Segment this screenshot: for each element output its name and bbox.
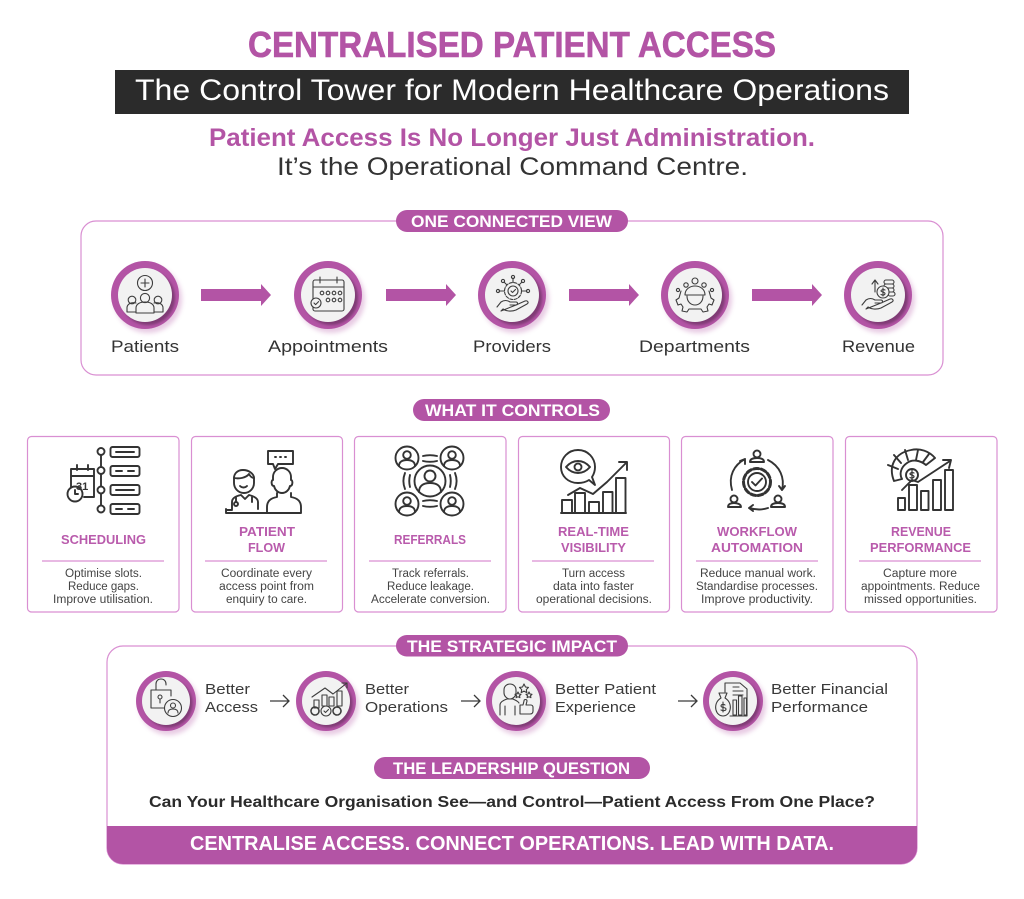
description: Coordinate every [221,568,312,580]
title: CENTRALISED PATIENT ACCESS [248,24,776,65]
node: departments [639,261,750,356]
label: providers: Providers [473,337,551,356]
description: Reduce gaps. [68,581,139,593]
description: Improve utilisation. [53,594,153,606]
heading [239,524,295,555]
footer banner [107,826,917,864]
heading: WORKFLOW [717,524,798,539]
icon: schedule timeline: 31 [76,481,88,493]
icon: chart and gears [311,683,347,716]
tagline: Patient Access Is No Longer Just Administration. [209,124,815,152]
heading: the leadership question: THE LEADERSHIP QUESTION [393,759,630,778]
description [861,568,980,606]
heading [870,524,971,555]
description [53,568,153,606]
arrow [386,284,456,306]
icon: revenue gauge [888,449,953,510]
description: Reduce leakage. [387,581,474,593]
label: Access [205,699,258,716]
label [205,681,258,716]
heading: REFERRALS [394,532,466,547]
panel: the strategic impact [107,635,917,864]
icon: gear cycle [728,450,785,511]
label: patients: Patients [111,337,179,356]
panel: workflow automation [682,436,833,612]
description [219,568,314,606]
label: Better Financial [771,681,888,698]
heading [711,524,803,555]
heading: VISIBILITY [561,540,626,555]
icon: calendar [311,277,344,311]
node: revenue [842,261,915,356]
heading: REVENUE [891,524,951,539]
description: missed opportunities. [864,594,977,606]
description: enquiry to care. [226,594,307,606]
icon: lock and person [151,679,182,716]
node: patients [111,261,182,356]
impact: better financial performance [703,671,888,735]
arrow [201,284,271,306]
icon: person with stars and thumbs up [500,684,533,715]
subtitle banner [115,70,909,114]
description: Standardise processes. [696,581,818,593]
tagline [209,124,815,181]
arrow [569,284,639,306]
icon: hand with network [496,275,530,311]
panel: real-time visibility [518,436,670,612]
panel: revenue performance [846,436,997,612]
description [536,568,652,606]
tagline: It’s the Operational Command Centre. [277,153,748,181]
heading: the strategic impact: THE STRATEGIC IMPACT [407,637,618,656]
icon: team gear [676,278,714,312]
icon: eye and growth chart [561,450,627,513]
arrow [752,284,822,306]
subtitle banner: The Control Tower for Modern Healthcare Operations [135,74,889,107]
icon: patients [127,276,163,313]
description: Accelerate conversion. [371,594,490,606]
heading: REAL-TIME [558,524,629,539]
node: appointments [268,261,388,356]
label: Operations [365,699,448,716]
description: data into faster [553,581,634,593]
impact: better access [136,671,258,735]
description [696,568,818,606]
description: operational decisions. [536,594,652,606]
footer banner: CENTRALISE ACCESS. CONNECT OPERATIONS. LEAD WITH DATA. [190,832,834,855]
label: departments: Departments [639,337,750,356]
leadership question text: Can Your Healthcare Organisation See—and Control—Patient Access From One Place? [149,794,875,811]
label [365,681,448,716]
label: Performance [771,699,868,716]
label [555,681,657,716]
description: Capture more [883,568,957,580]
heading: PERFORMANCE [870,540,971,555]
heading: FLOW [248,540,286,555]
label: Better [205,681,250,698]
label: Better Patient [555,681,657,698]
panel: scheduling [28,436,179,612]
label: revenue: Revenue [842,337,915,356]
description: Reduce manual work. [700,568,816,580]
icon: doctor and patient [226,451,301,513]
heading: SCHEDULING [61,532,146,547]
label [771,681,888,716]
arrow [270,695,289,707]
label: appointments: Appointments [268,337,388,356]
heading: AUTOMATION [711,540,803,555]
description [371,568,490,606]
arrow [678,695,697,707]
icon: hand with coins [862,280,895,309]
heading: PATIENT [239,524,295,539]
heading: one connected view: ONE CONNECTED VIEW [411,212,613,231]
node: providers [473,261,551,356]
description: appointments. Reduce [861,581,980,593]
label: Experience [555,699,636,716]
heading: what it controls: WHAT IT CONTROLS [425,401,600,420]
arrow [461,695,480,707]
impact: better patient experience [486,671,657,735]
heading [558,524,629,555]
panel: one connected view [81,210,943,375]
description: access point from [219,581,314,593]
description: Track referrals. [392,568,469,580]
impact: better operations [296,671,448,735]
icon: schedule timeline [68,447,140,514]
panel: patient flow [192,436,342,612]
label: Better [365,681,409,698]
description: Improve productivity. [701,594,813,606]
icon: referral network [396,446,464,516]
icon: money bag and report [716,683,747,716]
description: Turn access [562,568,625,580]
description: Optimise slots. [65,568,142,580]
panel: referrals [354,436,506,612]
